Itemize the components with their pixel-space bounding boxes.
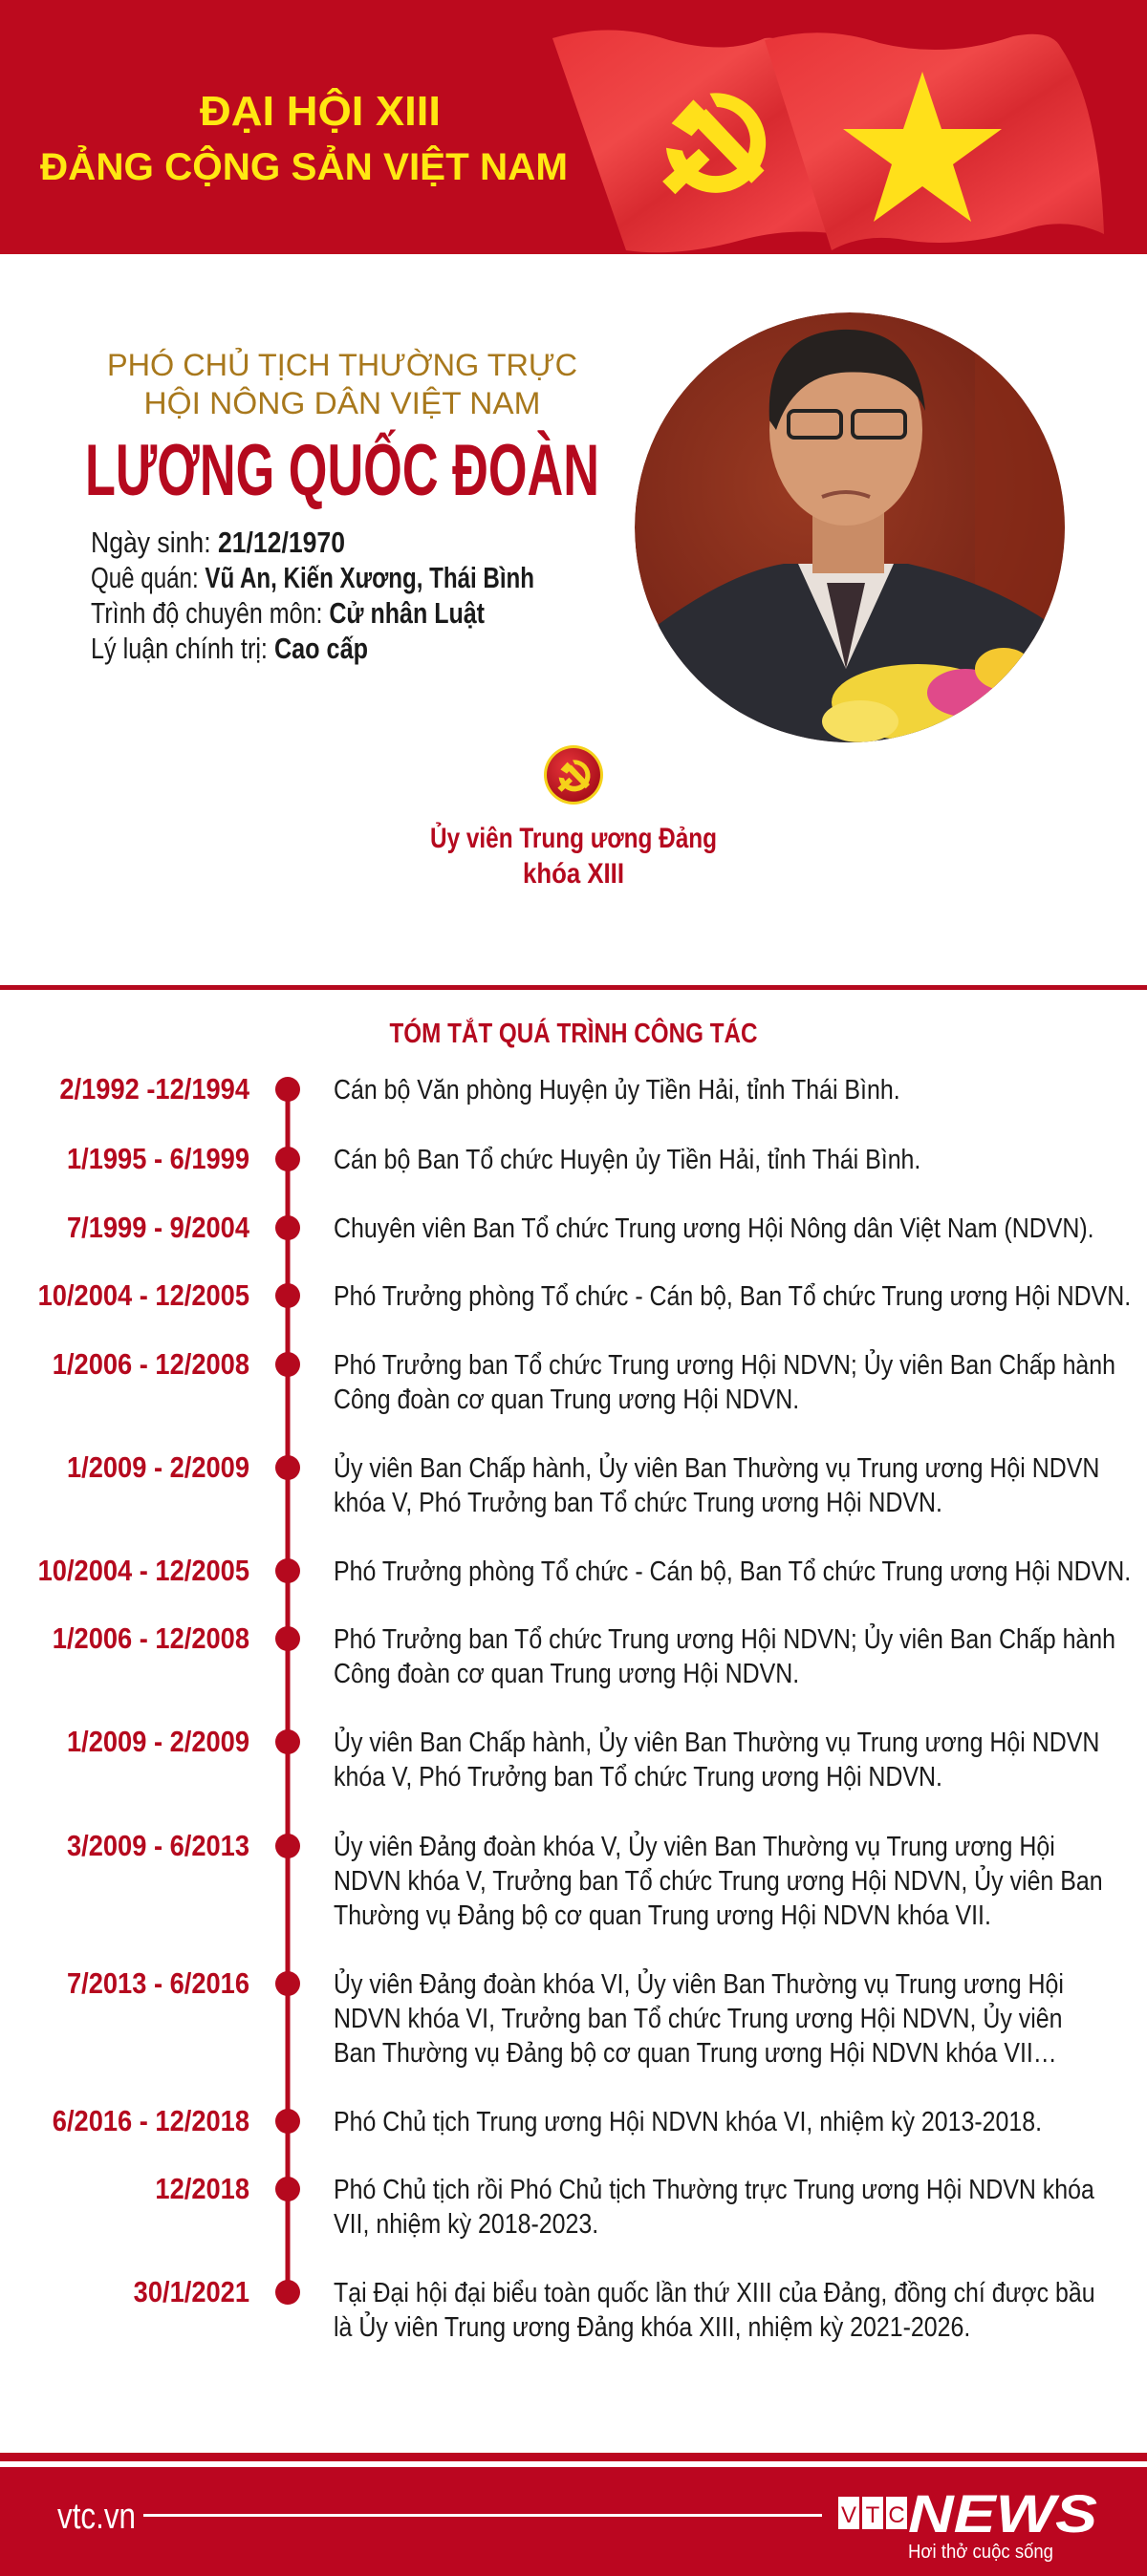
logo: VTC News: T	[866, 2502, 880, 2528]
logo: VTC News: NEWS	[908, 2483, 1097, 2544]
timeline descriptions: Ủy viên Đảng đoàn khóa V, Ủy viên Ban Thường vụ Trung ương Hội	[334, 1829, 1055, 1861]
title: ĐẠI HỘI XIII	[200, 86, 441, 135]
timeline dates: 10/2004 - 12/2005	[38, 1279, 249, 1312]
name: LƯƠNG QUỐC ĐOÀN	[85, 430, 599, 511]
membership caption	[430, 822, 717, 890]
membership caption: Ủy viên Trung ương Đảng	[430, 822, 717, 854]
timeline dates: 1/2009 - 2/2009	[67, 1726, 249, 1758]
personal info	[91, 526, 534, 665]
timeline heading: TÓM TẮT QUÁ TRÌNH CÔNG TÁC	[390, 1017, 758, 1049]
timeline descriptions: NDVN khóa VI, Trưởng ban Tổ chức Trung ương Hội NDVN, Ủy viên	[334, 2001, 1063, 2033]
timeline descriptions: Phó Chủ tịch rồi Phó Chủ tịch Thường trực Trung ương Hội NDVN khóa	[334, 2174, 1095, 2204]
timeline descriptions: Ủy viên Ban Chấp hành, Ủy viên Ban Thường vụ Trung ương Hội NDVN	[334, 1450, 1099, 1483]
logo: VTC News: V	[841, 2502, 856, 2528]
timeline descriptions: NDVN khóa V, Trưởng ban Tổ chức Trung ương Hội NDVN, Ủy viên Ban	[334, 1863, 1103, 1896]
timeline descriptions: Phó Trưởng ban Tổ chức Trung ương Hội NDVN; Ủy viên Ban Chấp hành	[334, 1347, 1115, 1380]
timeline descriptions: Công đoàn cơ quan Trung ương Hội NDVN.	[334, 1384, 799, 1414]
timeline descriptions: Tại Đại hội đại biểu toàn quốc lần thứ XIII của Đảng, đồng chí được bầu	[334, 2277, 1095, 2308]
timeline descriptions: Thường vụ Đảng bộ cơ quan Trung ương Hội NDVN khóa VII.	[334, 1900, 991, 1930]
timeline descriptions: Cán bộ Văn phòng Huyện ủy Tiền Hải, tỉnh Thái Bình.	[334, 1074, 900, 1105]
timeline descriptions: Phó Trưởng phòng Tổ chức - Cán bộ, Ban Tổ chức Trung ương Hội NDVN.	[334, 1280, 1131, 1311]
logo: VTC News	[838, 2483, 1097, 2563]
icon: flags	[552, 30, 1104, 252]
timeline descriptions: Cán bộ Ban Tổ chức Huyện ủy Tiền Hải, tỉnh Thái Bình.	[334, 1144, 920, 1174]
timeline descriptions: Ủy viên Ban Chấp hành, Ủy viên Ban Thường vụ Trung ương Hội NDVN	[334, 1725, 1099, 1757]
timeline descriptions: Phó Trưởng ban Tổ chức Trung ương Hội NDVN; Ủy viên Ban Chấp hành	[334, 1621, 1115, 1654]
timeline descriptions	[334, 1074, 1131, 2342]
subtitle	[107, 348, 577, 420]
timeline dates: 1/2006 - 12/2008	[53, 1622, 249, 1655]
timeline dates: 12/2018	[155, 2173, 249, 2205]
personal info: Trình độ chuyên môn: Cử nhân Luật	[91, 596, 485, 630]
timeline dates: 10/2004 - 12/2005	[38, 1555, 249, 1587]
timeline descriptions: Công đoàn cơ quan Trung ương Hội NDVN.	[334, 1658, 799, 1688]
timeline dates: 1/1995 - 6/1999	[67, 1143, 249, 1175]
timeline descriptions: VII, nhiệm kỳ 2018-2023.	[334, 2208, 598, 2239]
footer source text: vtc.vn	[57, 2497, 136, 2537]
timeline dates: 7/2013 - 6/2016	[67, 1967, 249, 2000]
subtitle: PHÓ CHỦ TỊCH THƯỜNG TRỰC	[107, 348, 577, 382]
timeline dates: 3/2009 - 6/2013	[67, 1830, 249, 1862]
subtitle: HỘI NÔNG DÂN VIỆT NAM	[143, 386, 541, 420]
portrait photo	[635, 312, 1065, 742]
membership caption: khóa XIII	[523, 858, 624, 890]
timeline dates: 2/1992 -12/1994	[59, 1073, 250, 1106]
personal info: Quê quán: Vũ An, Kiến Xương, Thái Bình	[91, 561, 534, 594]
title: ĐẢNG CỘNG SẢN VIỆT NAM	[40, 144, 568, 188]
timeline descriptions: Chuyên viên Ban Tổ chức Trung ương Hội Nông dân Việt Nam (NDVN).	[334, 1213, 1094, 1243]
logo: VTC News: Hơi thở cuộc sống	[908, 2542, 1053, 2563]
timeline descriptions: Phó Chủ tịch Trung ương Hội NDVN khóa VI, nhiệm kỳ 2013-2018.	[334, 2106, 1042, 2136]
timeline dates: 6/2016 - 12/2018	[53, 2105, 249, 2137]
timeline dates: 30/1/2021	[134, 2276, 249, 2308]
timeline descriptions: là Ủy viên Trung ương Đảng khóa XIII, nhiệm kỳ 2021-2026.	[334, 2309, 970, 2342]
logo: VTC News: C	[888, 2502, 905, 2528]
timeline dates: 1/2009 - 2/2009	[67, 1451, 249, 1484]
timeline dates	[38, 1073, 250, 2308]
timeline descriptions: khóa V, Phó Trưởng ban Tổ chức Trung ương Hội NDVN.	[334, 1487, 942, 1517]
timeline descriptions: Ban Thường vụ Đảng bộ cơ quan Trung ương Hội NDVN khóa VII…	[334, 2037, 1057, 2068]
personal info: Lý luận chính trị: Cao cấp	[91, 632, 368, 665]
timeline	[38, 1073, 1131, 2342]
timeline dates: 7/1999 - 9/2004	[67, 1212, 250, 1244]
timeline dates: 1/2006 - 12/2008	[53, 1348, 249, 1381]
footer	[0, 2453, 1147, 2576]
title	[40, 86, 568, 188]
timeline descriptions: Phó Trưởng phòng Tổ chức - Cán bộ, Ban Tổ chức Trung ương Hội NDVN.	[334, 1556, 1131, 1586]
icon: party emblem	[544, 745, 603, 805]
timeline descriptions: khóa V, Phó Trưởng ban Tổ chức Trung ương Hội NDVN.	[334, 1761, 942, 1792]
personal info: Ngày sinh: 21/12/1970	[91, 526, 345, 559]
header banner	[0, 0, 1147, 254]
timeline descriptions: Ủy viên Đảng đoàn khóa VI, Ủy viên Ban Thường vụ Trung ương Hội	[334, 1966, 1064, 1999]
